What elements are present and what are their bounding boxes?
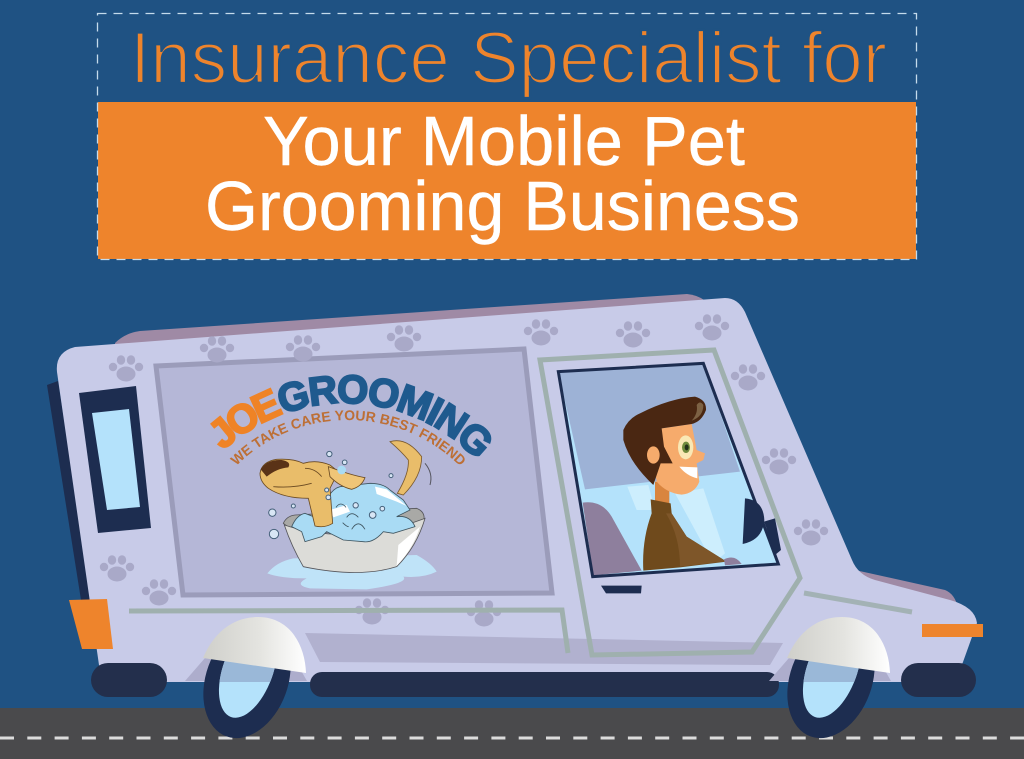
water puddle bbox=[267, 555, 437, 589]
front bumper bbox=[901, 663, 976, 697]
side sill bbox=[310, 672, 779, 697]
arm highlight bbox=[666, 513, 726, 567]
logo word GROOMING: GROOMING bbox=[278, 374, 492, 456]
lower side strip bbox=[305, 633, 783, 665]
orange title banner bbox=[98, 102, 916, 259]
cab window with driver bbox=[558, 363, 781, 593]
window glass bbox=[558, 363, 778, 577]
dog nose bbox=[261, 460, 289, 477]
rear wheel bbox=[185, 617, 307, 738]
title line two: Your Mobile Pet bbox=[263, 102, 745, 180]
foam bbox=[292, 483, 415, 542]
paw prints bbox=[100, 314, 828, 626]
tub rim back bbox=[283, 508, 424, 533]
dog mouth and eye lines bbox=[273, 468, 322, 487]
title line one: Insurance Specialist for bbox=[130, 18, 887, 99]
body lines bbox=[129, 350, 800, 655]
logo tagline: WE TAKE CARE YOUR BEST FRIEND bbox=[230, 410, 465, 464]
hair bbox=[623, 397, 706, 485]
neck bbox=[655, 482, 669, 505]
rear window bbox=[79, 386, 151, 533]
fender line bbox=[804, 593, 912, 612]
side mirror bbox=[743, 498, 781, 555]
door handle bbox=[601, 586, 642, 593]
tub bbox=[284, 518, 425, 572]
logo lettering bbox=[210, 374, 492, 464]
window frame bbox=[558, 363, 778, 577]
logo word JOE: JOE bbox=[210, 388, 284, 448]
eye bbox=[678, 435, 693, 459]
side panel bbox=[156, 349, 552, 595]
foam marks bbox=[336, 504, 365, 529]
smile bbox=[679, 467, 697, 478]
seat bbox=[583, 502, 642, 575]
hand on wheel bbox=[724, 557, 742, 565]
road bbox=[0, 708, 1024, 759]
ear bbox=[647, 446, 660, 464]
window streaks bbox=[627, 485, 725, 563]
rear dark strip bbox=[47, 381, 92, 600]
tub highlight bbox=[397, 527, 420, 566]
window upper tint bbox=[558, 363, 740, 489]
torso bbox=[643, 499, 727, 571]
logo illustration: dog in tub bbox=[260, 441, 437, 589]
rear bumper bbox=[91, 663, 167, 697]
tail motion lines bbox=[425, 463, 431, 485]
tail bbox=[390, 441, 422, 495]
front orange light bbox=[922, 624, 983, 637]
van body bbox=[57, 298, 977, 682]
hood shadow bbox=[855, 570, 958, 608]
title line three: Grooming Business bbox=[205, 167, 800, 245]
van bbox=[47, 294, 983, 738]
bubbles bbox=[269, 451, 393, 539]
dog ear bbox=[328, 467, 365, 489]
hair highlight bbox=[692, 402, 703, 421]
dog head and neck bbox=[260, 459, 338, 527]
rear orange light bbox=[69, 599, 113, 649]
dashed title frame bbox=[98, 14, 916, 260]
foam highlight bbox=[330, 487, 407, 517]
title block bbox=[98, 14, 916, 260]
face bbox=[653, 424, 705, 495]
roof shadow bbox=[115, 294, 704, 360]
front wheel bbox=[769, 617, 891, 738]
soap on head bbox=[337, 466, 346, 474]
